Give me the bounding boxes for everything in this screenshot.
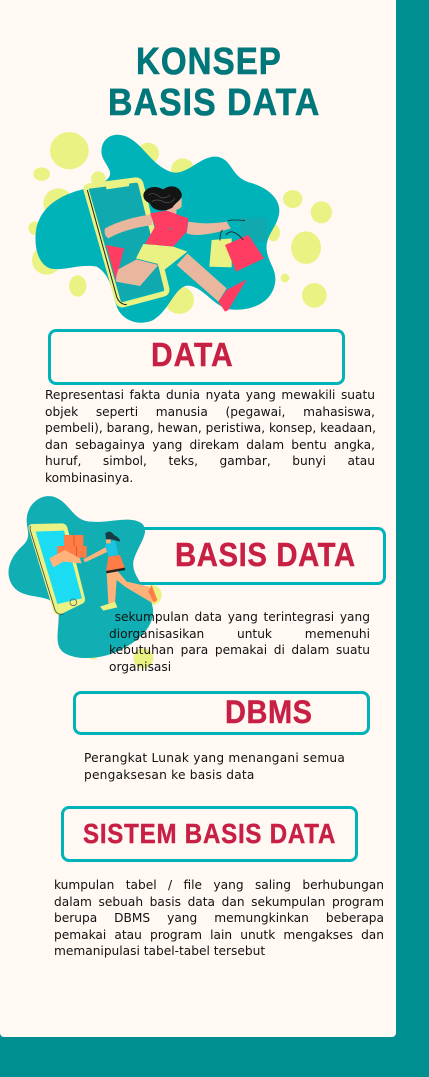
text: data definition: Representasi fakta dunia nyata yang mewakili suatu bbox=[45, 388, 375, 402]
text: dbms definition bbox=[84, 751, 345, 782]
text: data definition bbox=[45, 388, 376, 485]
text: data definition: objek seperti manusia (pegawai, mahasiswa, bbox=[45, 405, 375, 419]
illustration: delivery from phone bbox=[8, 496, 162, 668]
illustration: shopper running out of phone bbox=[28, 132, 332, 323]
text: sistem basis data definition: dalam sebuah basis data dan sekumpulan program bbox=[54, 895, 384, 909]
heading: sistem basis data: SISTEM BASIS DATA bbox=[83, 818, 336, 849]
text: sistem basis data definition: pemakai atau program lain unutk mengakses dan bbox=[54, 928, 384, 942]
text: basis data definition: sekumpulan data yang terintegrasi yang bbox=[115, 610, 370, 624]
title: KONSEP bbox=[136, 41, 282, 83]
text: dbms definition: Perangkat Lunak yang menangani semua bbox=[84, 751, 345, 765]
text: data definition: dan sebagainya yang direkam dalam bentu angka, bbox=[45, 438, 375, 452]
text: sistem basis data definition: memanipulasi tabel-tabel tersebut bbox=[54, 944, 265, 958]
text: dbms definition: pengaksesan ke basis data bbox=[84, 768, 255, 782]
heading: data: DATA bbox=[151, 336, 234, 373]
text: data definition: pembeli), barang, hewan, peristiwa, konsep, keadaan, bbox=[45, 421, 376, 435]
text: data definition: kombinasinya. bbox=[45, 471, 133, 485]
text: basis data definition bbox=[109, 610, 370, 674]
text: sistem basis data definition bbox=[54, 878, 384, 958]
heading: basis data: BASIS DATA bbox=[175, 536, 356, 573]
text: sistem basis data definition: berupa DBMS yang memungkinkan beberapa bbox=[54, 911, 384, 925]
heading box: dbms bbox=[73, 691, 370, 735]
text: sistem basis data definition: kumpulan tabel / file yang saling berhubungan bbox=[54, 878, 384, 892]
heading box: basis data bbox=[128, 527, 386, 585]
title: BASIS DATA bbox=[108, 82, 320, 124]
heading box: data bbox=[48, 329, 345, 385]
text: basis data definition: diorganisasikan untuk memenuhi bbox=[109, 627, 370, 641]
heading: dbms: DBMS bbox=[225, 694, 313, 730]
text: basis data definition: kebutuhan para pemakai di dalam suatu bbox=[109, 643, 370, 657]
heading box: sistem basis data bbox=[61, 806, 358, 862]
title bbox=[108, 41, 320, 124]
text: basis data definition: organisasi bbox=[109, 660, 171, 674]
text: data definition: huruf, simbol, teks, gambar, bunyi atau bbox=[45, 454, 375, 468]
